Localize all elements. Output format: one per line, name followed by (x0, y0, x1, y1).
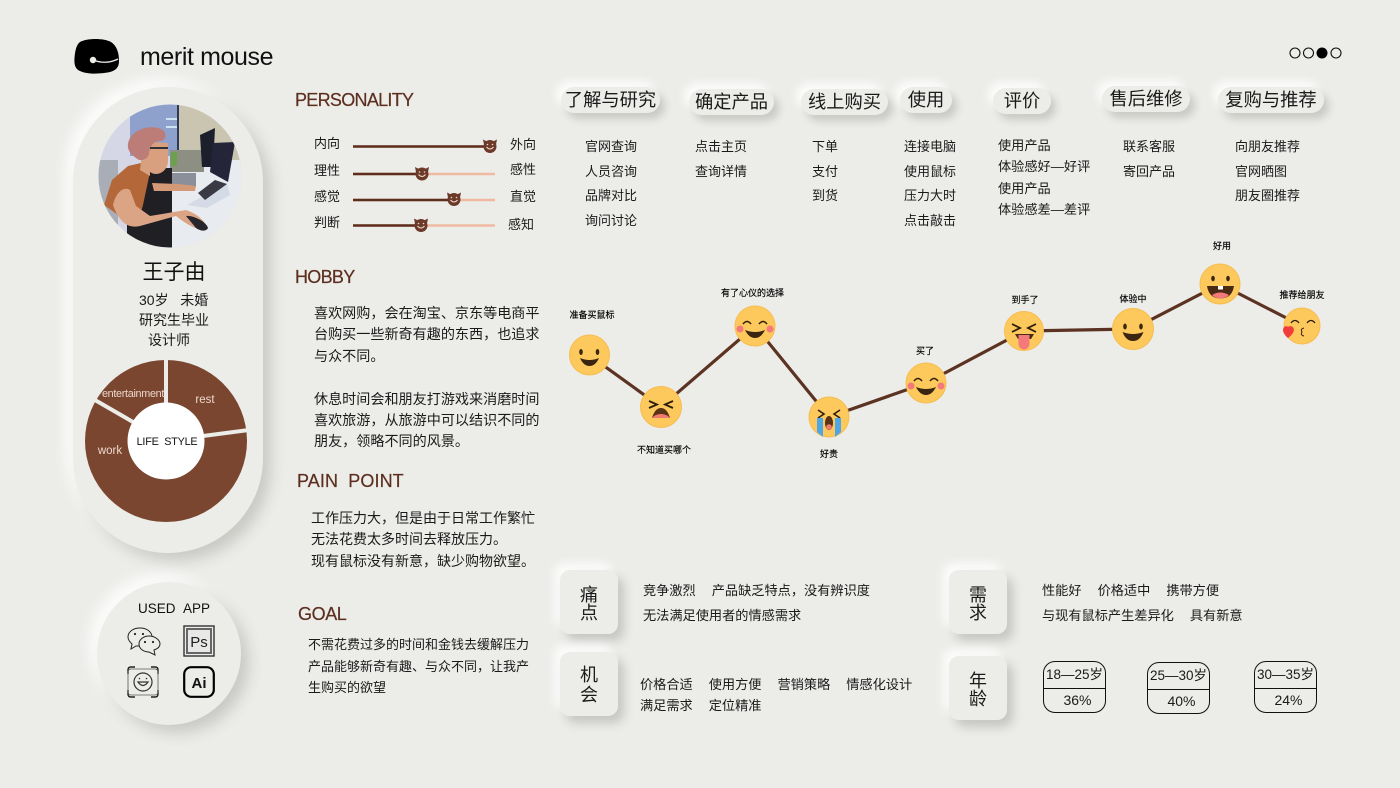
tag: needs (949, 570, 1007, 634)
slider labels: 理性 (314, 163, 340, 178)
pain points text: 竞争激烈 产品缺乏特点，没有辨识度 (643, 583, 870, 598)
persona details: 设计师 (148, 332, 190, 348)
heading: goal: GOAL (298, 604, 346, 624)
hobby text: 喜欢旅游，从旅游中可以结识不同的 (314, 412, 540, 428)
goal text (308, 637, 529, 695)
needs text: 与现有鼠标产生差异化 具有新意 (1042, 608, 1243, 622)
icon: illustrator (183, 666, 215, 698)
pain points text (643, 583, 870, 622)
journey stage: use: 使用 (908, 89, 944, 110)
pain point text (311, 510, 535, 569)
hobby text: 朋友，领略不同的风景。 (314, 433, 469, 449)
journey stage: research: 了解与研究 (565, 89, 656, 110)
journey stage: review: 评价 (1004, 90, 1040, 111)
pain point text: 现有鼠标没有新意，缺少购物欲望。 (311, 553, 535, 569)
journey stage: choose product: 确定产品 (695, 91, 768, 112)
tag: pain points (560, 570, 618, 634)
slider labels: 直觉 (510, 189, 536, 204)
heading: hobby: HOBBY (295, 267, 355, 287)
journey tasks: review: 体验感好—好评 (998, 159, 1090, 174)
emotion point: recommend to friends (1279, 289, 1325, 344)
icon: photoshop (183, 625, 215, 657)
emotion point: works well: 好用 (1213, 240, 1231, 251)
heading: pain point: PAIN POINT (297, 471, 404, 491)
panel: used apps (97, 582, 241, 725)
tag: age (949, 656, 1007, 720)
emotion curve chart (569, 240, 1325, 459)
pagination dots (1289, 48, 1342, 58)
tag: needs: 求 (969, 603, 987, 623)
journey tasks: after-sales: 寄回产品 (1123, 164, 1175, 178)
emotion point: received (1004, 294, 1044, 350)
journey tasks: use: 使用鼠标 (904, 164, 956, 178)
emotion point: ready to buy (569, 309, 615, 375)
persona details: 30岁 未婚 (139, 292, 208, 308)
journey tasks: after-sales (1123, 139, 1175, 178)
journey stage: choose product (689, 89, 774, 115)
tag: pain points: 痛 (580, 585, 598, 605)
age card: 18-25: 36% (1063, 692, 1092, 708)
icon: illustrator: Ai (192, 675, 206, 692)
journey tasks: research: 官网查询 (585, 139, 637, 154)
journey tasks: after-sales: 联系客服 (1123, 139, 1175, 154)
opportunities text: 价格合适 使用方便 营销策略 情感化设计 (640, 677, 912, 692)
journey tasks: review: 使用产品 (998, 181, 1051, 196)
needs text (1042, 583, 1243, 622)
journey stage: repurchase and recommend (1218, 87, 1324, 113)
emotion point: found a favourite: 有了心仪的选择 (721, 287, 784, 298)
slider labels: 感性 (510, 162, 536, 177)
logo: merit mouse (74, 39, 273, 74)
journey tasks: buy online (812, 139, 838, 203)
journey tasks: use: 连接电脑 (904, 139, 956, 154)
hobby text: 喜欢网购，会在淘宝、京东等电商平 (314, 305, 540, 321)
emotion point: works well (1200, 240, 1240, 304)
journey tasks: choose product: 点击主页 (695, 139, 747, 154)
journey tasks: review: 使用产品 (998, 138, 1051, 153)
hobby text: 台购买一些新奇有趣的东西，也追求 (314, 326, 540, 342)
journey tasks: research: 品牌对比 (585, 188, 637, 203)
emotion point: recommend to friends: 推荐给朋友 (1279, 289, 1325, 300)
journey stage: repurchase and recommend: 复购与推荐 (1225, 89, 1317, 110)
hobby text: 与众不同。 (314, 348, 384, 364)
age card: 30-35: 30—35岁 (1257, 667, 1314, 682)
journey stage: use (900, 87, 952, 113)
emotion point: experiencing: 体验中 (1119, 293, 1147, 304)
heading: personality: PERSONALITY (295, 90, 413, 110)
emotion point: received: 到手了 (1011, 294, 1039, 305)
sliders (353, 140, 497, 232)
donut chart: life style: rest (195, 394, 215, 406)
tag: age: 年 (969, 671, 987, 691)
donut chart: life style (85, 360, 247, 522)
journey stage: after-sales (1102, 86, 1190, 112)
panel: profile (73, 87, 263, 553)
emotion point: unsure: 不知道买哪个 (637, 444, 691, 455)
donut chart: life style: entertainment (102, 388, 164, 400)
slider labels: 感知 (508, 217, 534, 232)
icon: mouse (74, 39, 119, 74)
opportunities text (640, 677, 912, 713)
journey tasks: use: 压力大时 (904, 188, 956, 203)
heading: used app: USED APP (138, 601, 210, 616)
tag: pain points: 点 (580, 603, 598, 623)
persona details: 研究生毕业 (139, 312, 209, 328)
goal text: 不需花费过多的时间和金钱去缓解压力 (308, 637, 529, 652)
age card: 18-25: 18—25岁 (1046, 667, 1103, 682)
journey tasks: use (904, 139, 956, 228)
section: personality (295, 90, 536, 232)
emotion point: found a favourite (721, 287, 784, 346)
section: goal (298, 604, 529, 695)
emotion point: bought: 买了 (916, 346, 934, 356)
journey stage: after-sales: 售后维修 (1109, 88, 1183, 109)
photo: woman working at a computer (98, 104, 242, 248)
journey tasks: recommend (1235, 139, 1300, 203)
journey tasks: buy online: 到货 (812, 188, 838, 203)
journey tasks: recommend: 官网晒图 (1235, 164, 1287, 178)
brand name: merit mouse (140, 43, 273, 71)
tag: opportunities: 机 (580, 665, 598, 685)
emotion point: unsure (637, 386, 691, 455)
journey tasks: recommend: 向朋友推荐 (1235, 139, 1300, 154)
hobby text: 休息时间会和朋友打游戏来消磨时间 (314, 391, 540, 407)
icon: photoshop: Ps (190, 634, 208, 651)
journey tasks: research: 人员咨询 (585, 164, 637, 178)
section: hobby (295, 267, 540, 449)
tag: opportunities (560, 652, 618, 716)
persona name: 王子由 (142, 261, 206, 284)
tag: opportunities: 会 (580, 685, 598, 705)
slider labels: 内向 (314, 136, 340, 151)
pain point text: 工作压力大，但是由于日常工作繁忙 (311, 510, 535, 526)
journey stage: buy online: 线上购买 (808, 91, 881, 112)
age card: 30-35: 24% (1274, 692, 1303, 708)
donut chart: life style: LIFE STYLE (137, 436, 197, 448)
slider labels: 判断 (314, 215, 340, 230)
persona details (139, 292, 209, 348)
emotion point: too expensive: 好贵 (820, 448, 838, 459)
slider labels (314, 136, 536, 232)
pain point text: 无法花费太多时间去释放压力。 (311, 531, 507, 547)
journey tasks: research: 询问讨论 (585, 212, 637, 228)
goal text: 产品能够新奇有趣、与众不同，让我产 (308, 658, 529, 674)
journey tasks: choose product: 查询详情 (695, 164, 747, 178)
journey tasks: review: 体验感差—差评 (998, 202, 1090, 217)
journey tasks: buy online: 支付 (812, 164, 838, 178)
journey tasks: research (585, 139, 637, 228)
journey stage: buy online (801, 89, 888, 115)
emotion point: too expensive (809, 397, 849, 459)
age card: 18-25 (1043, 661, 1106, 713)
tag: age: 龄 (969, 689, 987, 709)
slider labels: 外向 (510, 137, 536, 152)
journey stage: review (993, 88, 1051, 114)
journey tasks: use: 点击敲击 (904, 212, 956, 228)
emotion point: bought (906, 346, 946, 403)
goal text: 生购买的欲望 (308, 680, 386, 695)
journey tasks: buy online: 下单 (812, 139, 838, 154)
age card: 25-30: 25—30岁 (1150, 668, 1207, 683)
needs text: 性能好 价格适中 携带方便 (1042, 583, 1219, 598)
emotion point: experiencing (1112, 293, 1154, 350)
section: pain point (297, 471, 535, 569)
tag: needs: 需 (969, 585, 987, 605)
icon: smile camera (127, 666, 159, 698)
hobby text (314, 305, 540, 449)
age card: 25-30: 40% (1167, 693, 1196, 709)
slider labels: 感觉 (314, 189, 340, 204)
pain points text: 无法满足使用者的情感需求 (643, 608, 801, 622)
emotion point: ready to buy: 准备买鼠标 (569, 309, 615, 320)
journey tasks: recommend: 朋友圈推荐 (1235, 188, 1300, 203)
journey tasks: review (998, 138, 1090, 217)
age card: 25-30 (1147, 662, 1210, 714)
icon: wechat (128, 628, 160, 656)
opportunities text: 满足需求 定位精准 (640, 698, 762, 713)
journey tasks: choose product (695, 139, 747, 178)
donut chart: life style: work (97, 445, 122, 457)
curve line (589, 284, 1302, 417)
age card: 30-35 (1254, 661, 1317, 713)
